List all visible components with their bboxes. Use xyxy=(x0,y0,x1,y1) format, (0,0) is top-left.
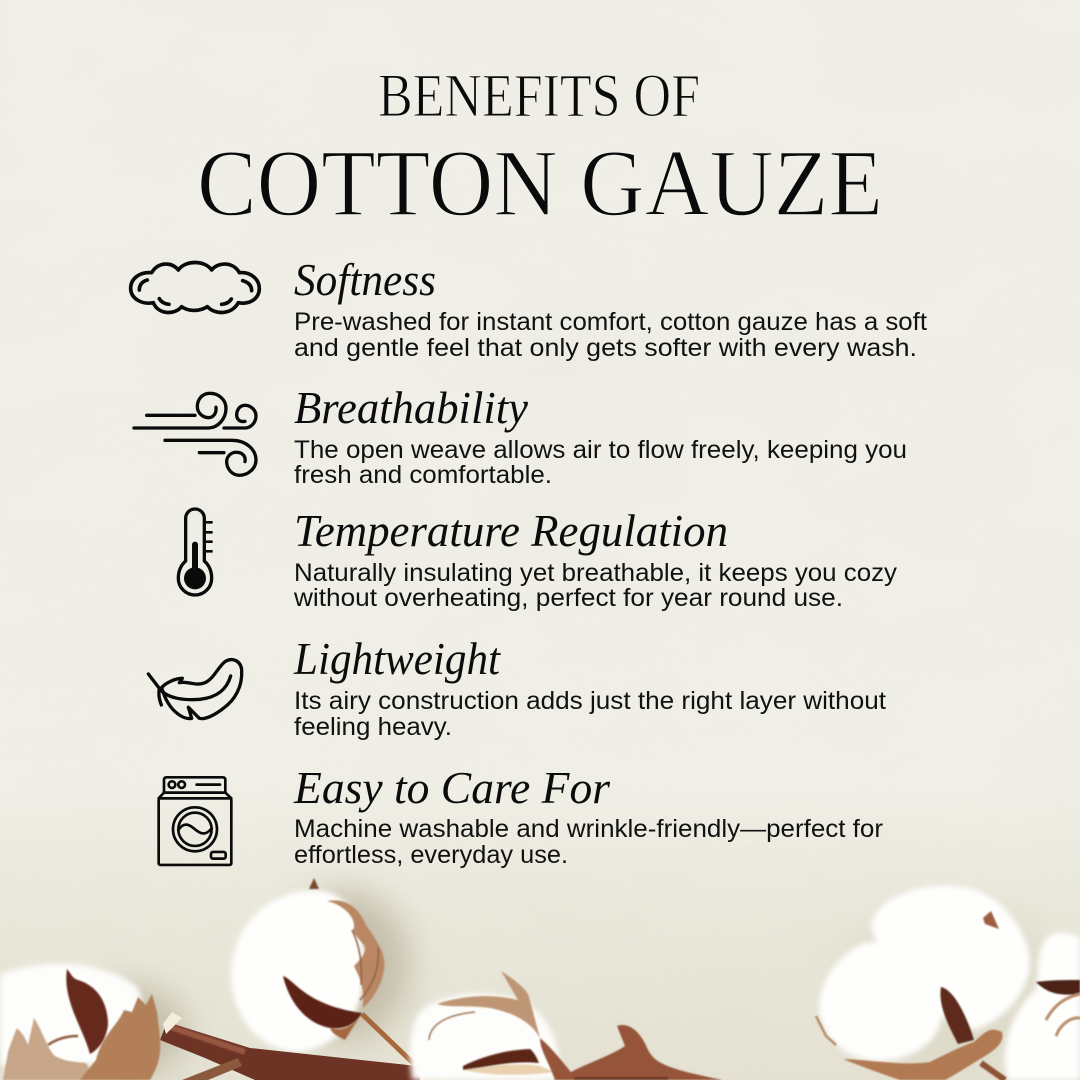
husk: right boll xyxy=(816,911,1005,1080)
boll husk xyxy=(429,971,555,1075)
stem xyxy=(160,1022,420,1080)
icon: wind xyxy=(134,393,256,475)
benefit: breathability xyxy=(294,383,907,489)
boll shadows xyxy=(75,890,410,1075)
description: easy to care for: Machine washable and wrinkle-friendly—perfect for xyxy=(294,815,883,843)
boll: centre xyxy=(410,994,559,1080)
description: lightweight: feeling heavy. xyxy=(294,713,452,741)
benefit: lightweight xyxy=(293,634,886,741)
description: temperature regulation: Naturally insulating yet breathable, it keeps you cozy xyxy=(294,559,898,587)
twig: right of boll xyxy=(540,1025,723,1080)
boll: far right xyxy=(1005,933,1080,1080)
heading: breathability: Breathability xyxy=(294,383,528,433)
description: softness: Pre-washed for instant comfort, cotton gauze has a soft xyxy=(294,308,927,336)
title xyxy=(197,63,883,236)
boll: far left xyxy=(0,964,142,1065)
description: temperature regulation: without overheating, perfect for year round use. xyxy=(293,584,843,612)
cotton branch: right group xyxy=(816,886,1080,1080)
benefit: temperature regulation xyxy=(293,506,898,612)
icon: feather xyxy=(148,660,242,719)
boll husk, far left xyxy=(3,969,160,1080)
heading: easy to care for: Easy to Care For xyxy=(293,763,610,813)
description: softness: and gentle feel that only gets softer with every wash. xyxy=(294,334,917,362)
seed pod fibres xyxy=(163,1012,182,1034)
title line: cotton gauze: COTTON GAUZE xyxy=(197,130,883,236)
description: breathability: fresh and comfortable. xyxy=(294,461,552,489)
icon: cloud xyxy=(131,262,259,312)
husk: far right boll xyxy=(1036,980,1080,1036)
description: easy to care for: effortless, everyday use. xyxy=(294,841,568,869)
benefit: softness xyxy=(294,255,927,362)
heading: temperature regulation: Temperature Regulation xyxy=(294,506,728,556)
icon: washing machine xyxy=(159,777,231,865)
heading: softness: Softness xyxy=(294,255,436,305)
icon: thermometer xyxy=(178,509,213,595)
title line: benefits of: BENEFITS OF xyxy=(378,63,700,130)
boll: centre left xyxy=(231,890,365,1052)
boll shadow xyxy=(840,900,1060,1070)
boll: right lower lobe xyxy=(819,942,943,1061)
cotton branch: centre boll and twigs xyxy=(410,971,723,1080)
boll husk, right side xyxy=(283,878,384,1040)
heading: lightweight: Lightweight xyxy=(293,634,501,684)
benefit: easy to care for xyxy=(293,763,883,869)
boll: right upper lobe xyxy=(871,886,1030,1030)
description: lightweight: Its airy construction adds just the right layer without xyxy=(294,687,886,715)
cotton branch: left group xyxy=(0,878,420,1080)
description: breathability: The open weave allows air to flow freely, keeping you xyxy=(294,436,907,464)
